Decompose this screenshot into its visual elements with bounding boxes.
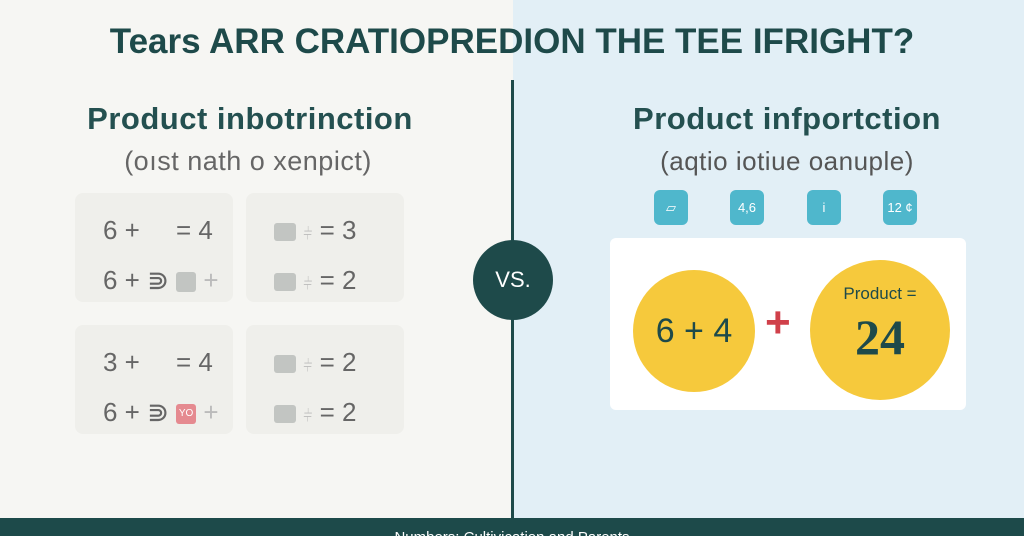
icon 1: [654, 190, 688, 225]
vs circle: VS.: [495, 267, 531, 292]
plus sign: +: [765, 298, 791, 347]
icon 4: 12 ¢: [887, 200, 913, 215]
vs circle: [473, 240, 553, 320]
icon row: [654, 190, 917, 225]
right heading: Product infportction: [633, 101, 941, 136]
right background: [513, 0, 1024, 518]
title: Tears ARR CRATIOPREDION THE TEE IFRIGHT?: [110, 22, 914, 61]
circle: product: [810, 260, 950, 400]
card 4: ⫩ = 2: [303, 347, 357, 377]
card 3: [75, 325, 233, 434]
circle: product: Product =: [843, 284, 917, 303]
card 3: 6 + ⋑ +: [103, 397, 219, 427]
card 3: YO: [179, 408, 193, 419]
card 2: [246, 193, 404, 302]
divider: [511, 80, 514, 520]
circle: 6+4: 6 + 4: [656, 312, 732, 350]
card 1: 6 + ⋑ +: [103, 265, 219, 295]
circle: product: 24: [855, 309, 905, 365]
icon 1: ▱: [666, 200, 676, 215]
card 2: ⫩ = 2: [303, 265, 357, 295]
card 2: ⫩ = 3: [303, 215, 357, 245]
icon 2: [730, 190, 764, 225]
icon 3: i: [823, 200, 825, 215]
card 4: ⫩ = 2: [303, 397, 357, 427]
card 1: [75, 193, 233, 302]
result panel: [610, 238, 966, 410]
icon 4: [883, 190, 917, 225]
left subtitle: (oıst nath o xenpict): [124, 146, 372, 176]
card 4: [246, 325, 404, 434]
footer: [0, 518, 1024, 536]
icon 2: 4,6: [738, 200, 756, 215]
card 3: 3 + = 4: [103, 347, 213, 377]
icon 3: [807, 190, 841, 225]
circle: 6+4: [633, 270, 755, 392]
left heading: Product inbotrinction: [87, 101, 413, 136]
card 1: 6 + = 4: [103, 215, 213, 245]
right subtitle: (aqtio iotiue oanuple): [660, 146, 914, 176]
